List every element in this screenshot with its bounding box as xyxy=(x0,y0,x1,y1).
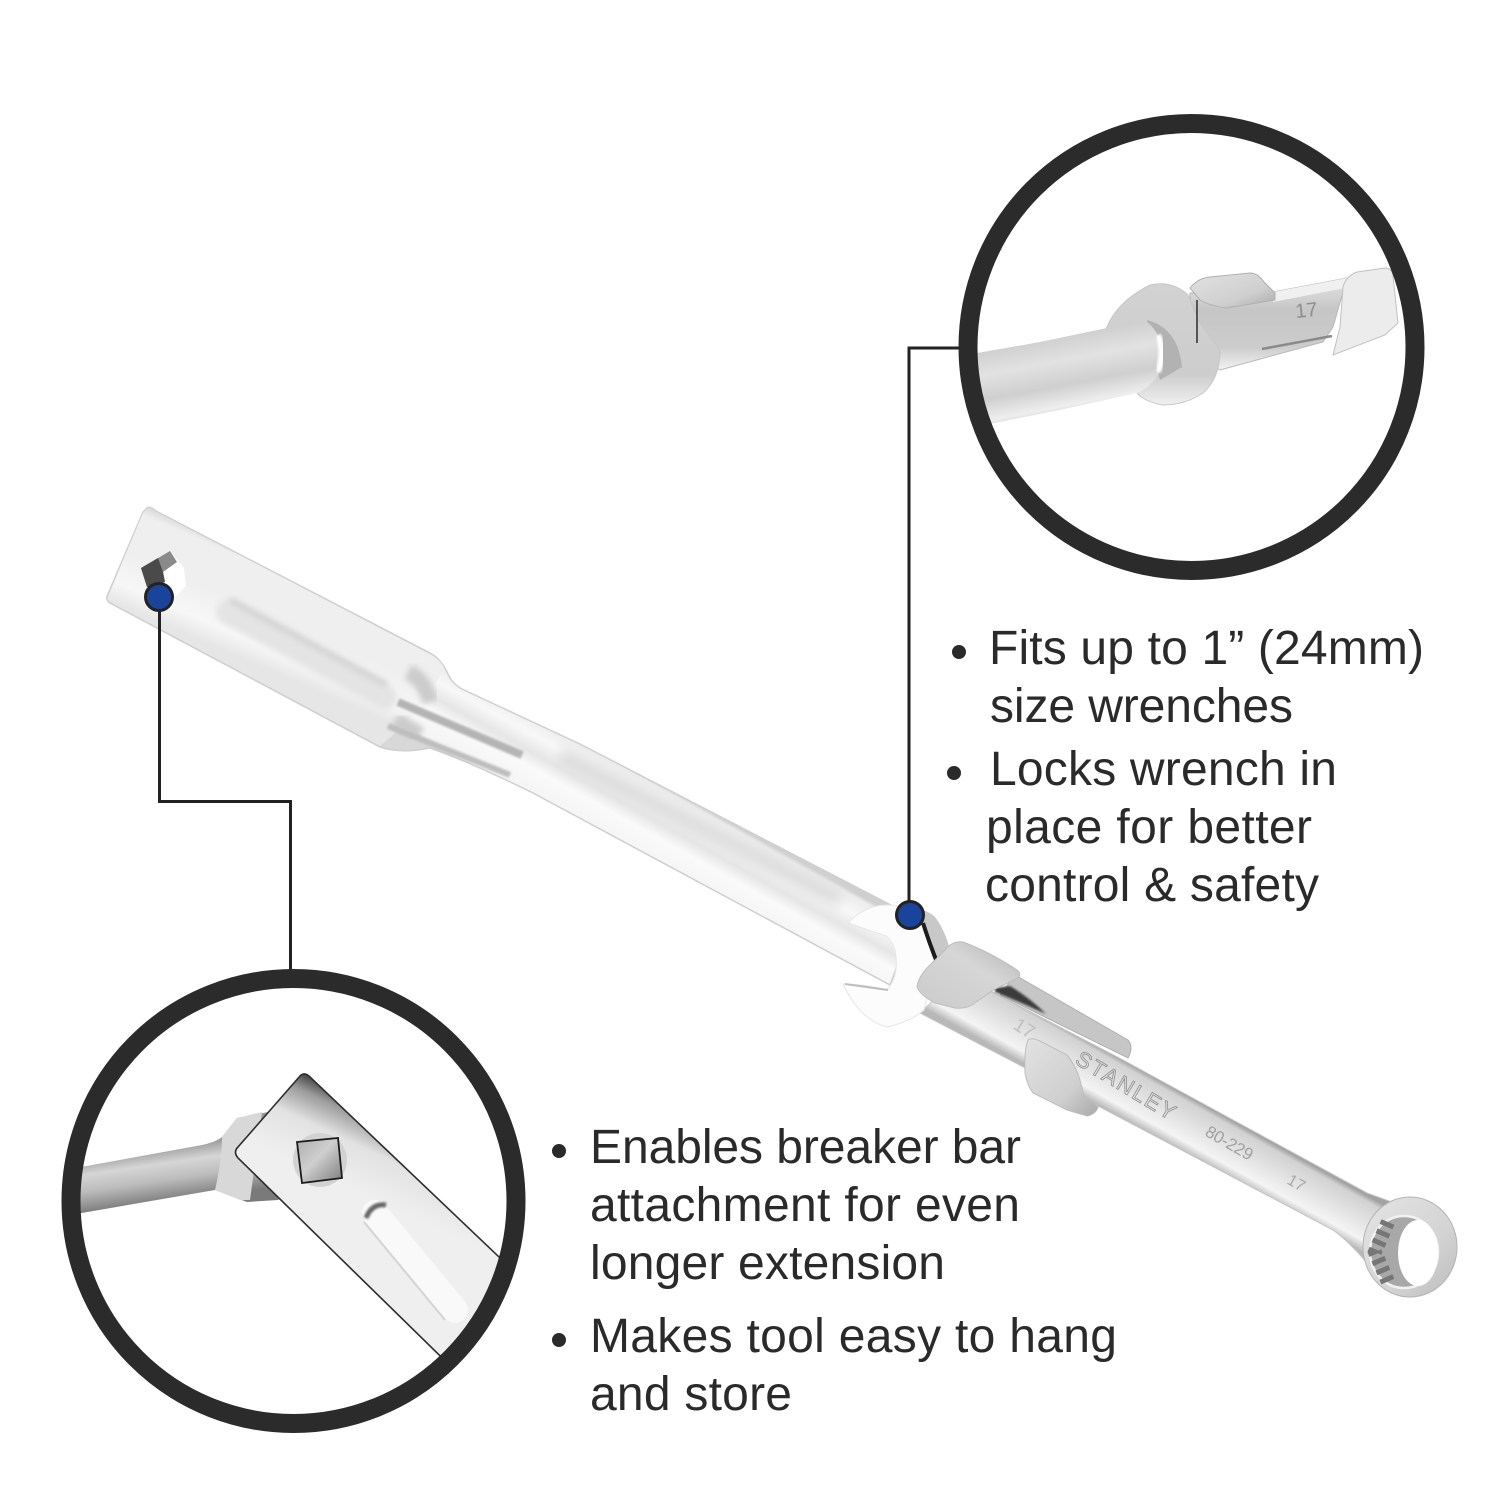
bullet 2 xyxy=(947,766,961,780)
line: place for better: place for better xyxy=(986,801,1312,854)
bullet 1 xyxy=(552,1144,566,1158)
line: longer extension: longer extension xyxy=(590,1237,945,1290)
embossed wrench markings: 80-229 xyxy=(1202,1122,1257,1164)
embossed wrench markings xyxy=(1009,1014,1308,1195)
text block: top feature bullets xyxy=(947,622,1424,912)
embossed wrench markings: 17 xyxy=(1009,1014,1038,1043)
embossed wrench markings: 17 xyxy=(1284,1172,1308,1195)
shadow below clip xyxy=(995,986,1046,1014)
line: Locks wrench in: Locks wrench in xyxy=(990,743,1337,796)
detail photo: wrench on bar xyxy=(960,268,1398,430)
line: control & safety: control & safety xyxy=(985,859,1319,912)
front clip on bar xyxy=(917,942,1020,1008)
marker dot: wrench jaw xyxy=(896,902,924,928)
product: extender bar with wrench xyxy=(107,507,1457,1297)
line: size wrenches: size wrenches xyxy=(990,680,1293,733)
hex hole in bar xyxy=(141,551,186,596)
detail photo: bar end with square hole xyxy=(80,1073,500,1356)
panel: top detail circle, wrench locked xyxy=(960,124,1415,570)
circle outline xyxy=(71,978,516,1424)
bullet 1 xyxy=(952,645,966,659)
embossed wrench markings: STANLEY xyxy=(1071,1046,1181,1125)
line: Enables breaker bar: Enables breaker bar xyxy=(590,1121,1021,1174)
marker dot: square hole xyxy=(146,584,172,610)
box ring end xyxy=(1363,1197,1457,1297)
line: Fits up to: Fits up to 1” (24mm) xyxy=(989,622,1424,675)
text block: bottom feature bullets xyxy=(552,1121,1117,1421)
rear clip on bar xyxy=(1025,1039,1098,1116)
bullet 2 xyxy=(552,1333,566,1347)
circle outline xyxy=(968,124,1415,570)
extender bar xyxy=(107,507,915,985)
leader line: square hole to bottom circle xyxy=(160,610,290,972)
open jaw of wrench xyxy=(843,905,950,1027)
rail slot at bar end xyxy=(1000,975,1131,1058)
combination wrench shaft xyxy=(920,975,1400,1282)
leader line: jaw to top circle xyxy=(909,348,962,902)
panel: bottom detail circle, square drive xyxy=(70,978,540,1424)
line: attachment for even: attachment for even xyxy=(590,1179,1020,1232)
detail photo: wrench on bar: 17 xyxy=(1294,299,1319,323)
line: Makes tool easy to hang: Makes tool easy to hang xyxy=(590,1310,1117,1363)
line: and store: and store xyxy=(590,1368,792,1421)
